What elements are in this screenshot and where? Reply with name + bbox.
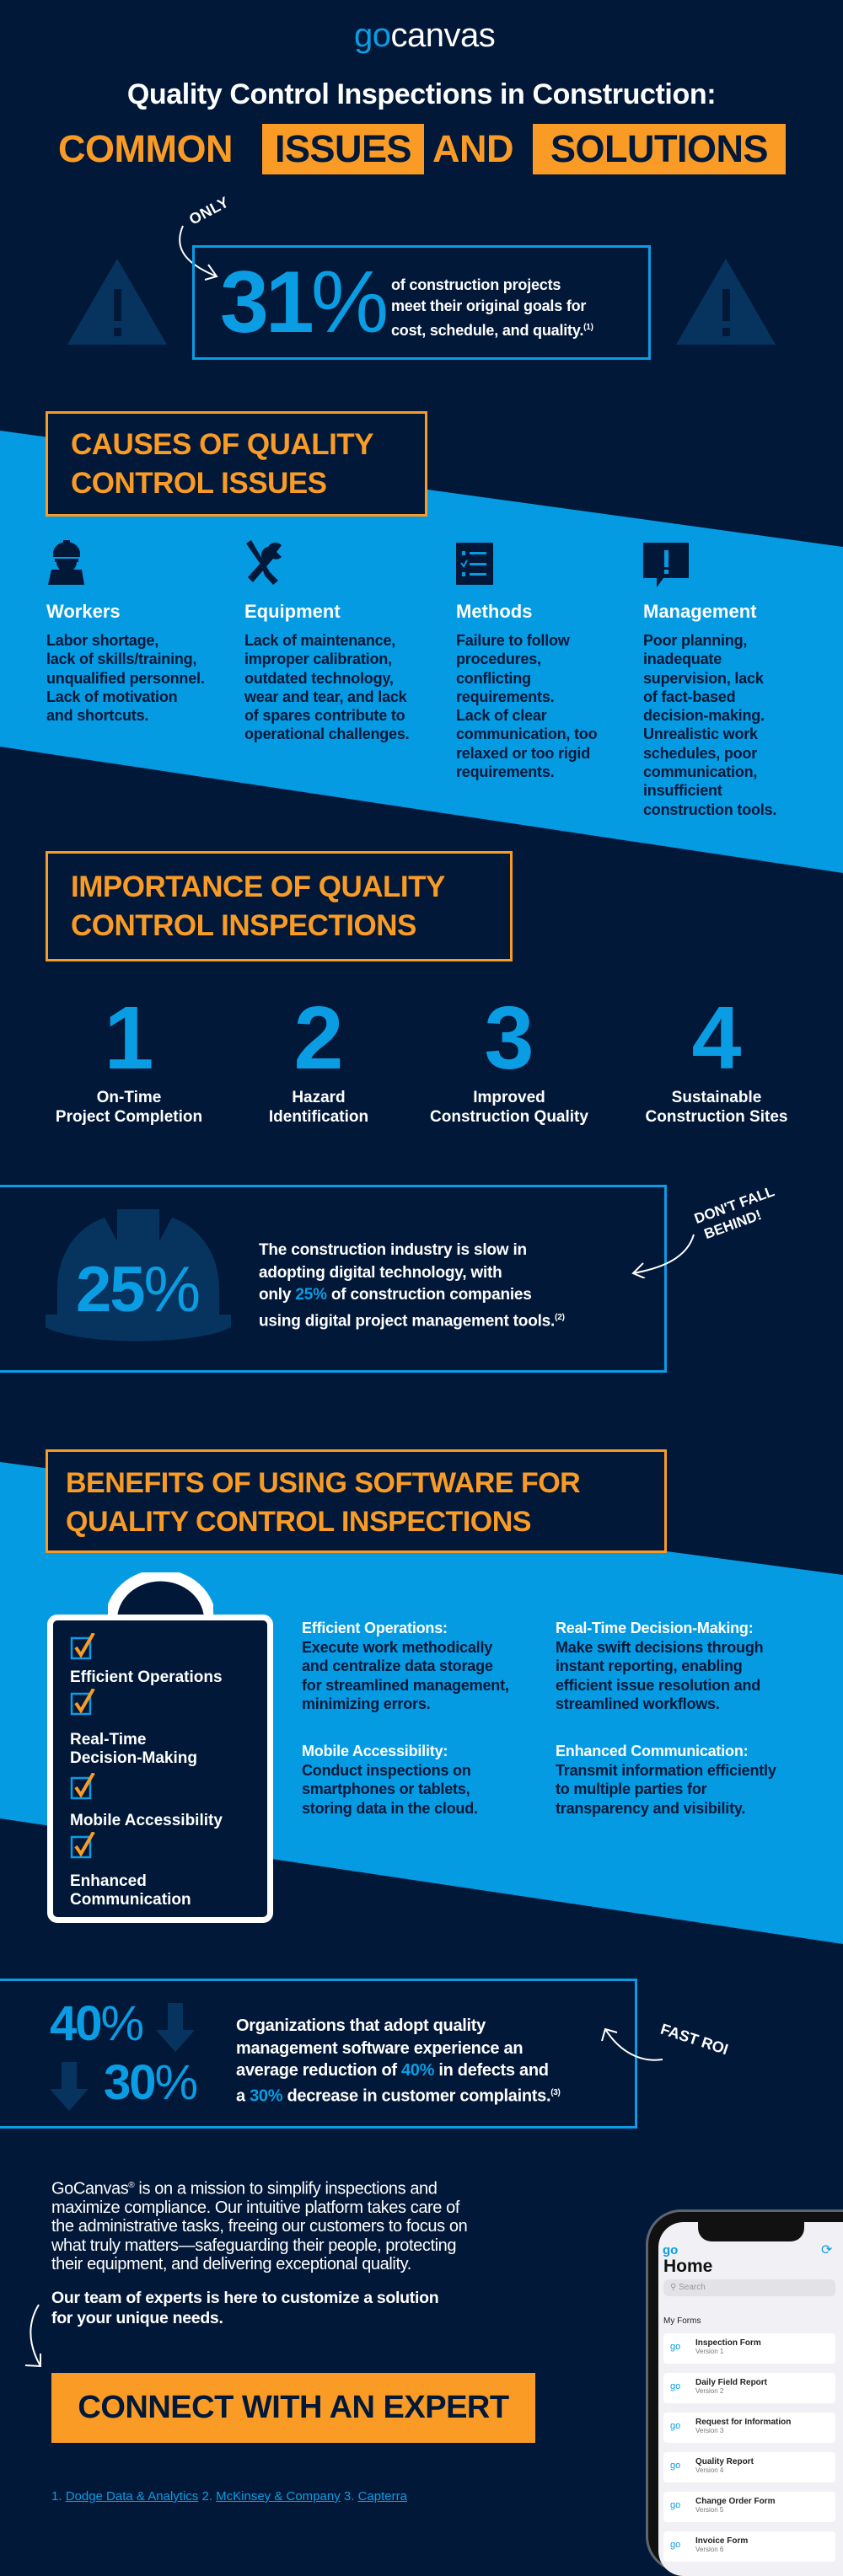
icon: checklist	[456, 543, 493, 585]
benefit: efficient operations: and centralize data storage	[302, 1658, 493, 1674]
subtitle: common issues and solutions: ISSUES	[275, 127, 411, 170]
benefit: mobile: Conduct inspections on	[302, 1761, 471, 1778]
panel: workers: lack of skills/training,	[46, 651, 196, 667]
CTA button: CONNECT WITH AN EXPERT	[78, 2390, 509, 2425]
benefit: real-time: Real-Time Decision-Making:	[556, 1620, 754, 1636]
text: QUALITY CONTROL INSPECTIONS	[66, 1506, 531, 1538]
benefit: mobile: smartphones or tablets,	[302, 1781, 470, 1797]
form list: go	[670, 2500, 680, 2510]
panel: equipment: wear and tear, and lack	[244, 688, 406, 705]
mission text: GoCanvas® is on a mission to simplify inspections and	[51, 2180, 438, 2198]
panel: methods: Methods	[456, 601, 532, 622]
panel: equipment: outdated technology,	[244, 670, 394, 687]
stat box 25%: using digital project management tools.(2)	[259, 1312, 565, 1330]
benefit: mobile: Mobile Accessibility:	[302, 1743, 448, 1759]
form list: Version 6	[695, 2546, 723, 2553]
check items: Enhanced	[70, 1872, 147, 1890]
subtitle: common issues and solutions: SOLUTIONS	[550, 127, 768, 170]
item 3: 3	[485, 988, 534, 1088]
item 4: 4	[692, 988, 741, 1088]
stat box 40% 30%: average reduction of 40% in defects and	[236, 2061, 549, 2080]
check items: Efficient Operations	[70, 1668, 223, 1686]
benefit: mobile	[302, 1743, 478, 1817]
title: Quality Control Inspections in Construction:	[127, 78, 716, 110]
panel: workers: Labor shortage,	[46, 632, 158, 649]
panel: methods	[456, 543, 597, 780]
phone mockup	[646, 2209, 843, 2576]
callout: fast roi	[601, 2021, 730, 2061]
form list: Quality Report	[695, 2457, 754, 2466]
benefit: real-time: streamlined workflows.	[556, 1695, 720, 1712]
clipboard checklist	[47, 1572, 273, 1923]
icon: tools	[246, 540, 282, 585]
phone mockup: Home	[663, 2257, 712, 2276]
benefit: communication: to multiple parties for	[556, 1781, 706, 1797]
heading: importance	[46, 851, 513, 961]
stat box 25%: only 25% of construction companies	[259, 1286, 532, 1304]
panel: equipment: operational challenges.	[244, 726, 409, 742]
form list: Version 5	[695, 2506, 723, 2514]
item 2: 2	[294, 988, 343, 1088]
panel: equipment: Lack of maintenance,	[244, 632, 395, 649]
text: IMPORTANCE OF QUALITY	[71, 870, 445, 903]
subtitle: common issues and solutions: COMMON	[58, 127, 233, 170]
check items: Mobile Accessibility	[70, 1812, 223, 1829]
stat box 25%: 25%	[76, 1254, 199, 1325]
panel: management: Poor planning,	[643, 632, 747, 649]
stat box 25%: adopting digital technology, with	[259, 1264, 502, 1282]
form list: Change Order Form	[695, 2497, 775, 2506]
panel: methods: Lack of clear	[456, 707, 546, 724]
benefit: real-time	[556, 1620, 763, 1712]
panel: methods: Failure to follow	[456, 632, 570, 649]
item 3: Improved	[473, 1089, 545, 1106]
arrow: down to CTA	[25, 2304, 41, 2367]
panel: workers: Workers	[46, 601, 121, 622]
benefit: efficient operations: Execute work methodically	[302, 1638, 492, 1655]
icon: helmet	[46, 1209, 231, 1342]
panel: equipment	[244, 540, 409, 742]
panel: equipment: of spares contribute to	[244, 707, 405, 724]
text: CAUSES OF QUALITY	[71, 428, 373, 461]
stat box 40% 30%: a 30% decrease in customer complaints.(3)	[236, 2086, 561, 2105]
icon: down arrow	[50, 2062, 89, 2111]
item 1: 1	[105, 988, 153, 1088]
footnotes: 1. Dodge Data & Analytics 2. McKinsey & Company 3. Capterra	[51, 2489, 407, 2504]
callout: fast roi: FAST ROI	[658, 2021, 730, 2058]
panel: management: communication,	[643, 763, 757, 780]
heading: causes	[46, 411, 427, 517]
form list: Version 1	[695, 2348, 723, 2355]
icon: worker	[48, 540, 84, 585]
icon: down arrow	[156, 2003, 195, 2052]
item 1: On-Time	[97, 1089, 161, 1106]
callout: only label and arrow: ONLY	[186, 193, 232, 228]
logo: gocanvas	[354, 17, 495, 54]
icon: alert speech bubble	[643, 543, 689, 587]
text: CONTROL ISSUES	[71, 467, 327, 500]
form list: go	[670, 2461, 680, 2471]
item 4	[646, 988, 787, 1126]
phone mockup: ⚲ Search	[670, 2283, 706, 2292]
benefit: efficient operations: for streamlined management,	[302, 1677, 509, 1694]
item 1: Project Completion	[56, 1108, 202, 1126]
benefit: efficient operations: Efficient Operations:	[302, 1620, 448, 1636]
CTA button	[51, 2373, 535, 2443]
subtitle: common issues and solutions	[58, 124, 786, 174]
form list: go	[670, 2342, 680, 2352]
panel: management: inadequate	[643, 651, 722, 667]
panel: management: Unrealistic work	[643, 726, 758, 742]
panel: management	[643, 543, 776, 818]
benefit: communication: Enhanced Communication:	[556, 1743, 748, 1759]
panel: workers: unqualified personnel.	[46, 670, 205, 687]
panel: management: supervision, lack	[643, 670, 764, 687]
panel: methods: requirements.	[456, 763, 554, 780]
stat box 40% 30%: 30%	[104, 2055, 196, 2110]
callout: only label and arrow	[179, 193, 232, 281]
text: BENEFITS OF USING SOFTWARE FOR	[66, 1467, 580, 1499]
benefit: real-time: Make swift decisions through	[556, 1638, 763, 1655]
phone mockup: My Forms	[663, 2316, 701, 2326]
check items: Communication	[70, 1891, 191, 1909]
stat box 31%: cost, schedule, and quality.(1)	[391, 322, 593, 339]
check items: Decision-Making	[70, 1749, 197, 1767]
mission text: their equipment, and delivering exceptional quality.	[51, 2255, 411, 2273]
panel: workers: Lack of motivation	[46, 688, 177, 705]
panel: management: insufficient	[643, 782, 722, 799]
stat box 31%	[192, 245, 651, 360]
form list: Version 4	[695, 2466, 723, 2474]
item 3	[430, 988, 588, 1126]
phone mockup: ⟳	[821, 2243, 832, 2257]
check items	[70, 1633, 223, 1909]
stat box 31%: 31%	[220, 254, 385, 351]
panel: management: schedules, poor	[643, 745, 757, 762]
item 3: Construction Quality	[430, 1108, 588, 1126]
panel: methods: requirements.	[456, 688, 554, 705]
benefit: efficient operations	[302, 1620, 509, 1712]
benefit: real-time: efficient issue resolution and	[556, 1677, 760, 1694]
form list	[663, 2333, 835, 2562]
panel: workers	[46, 540, 205, 724]
callout: don't fall behind: DON'T FALL	[692, 1183, 776, 1227]
text: CONTROL INSPECTIONS	[71, 909, 416, 942]
form list: Inspection Form	[695, 2338, 761, 2348]
panel: methods: conflicting	[456, 670, 531, 687]
numbered list: importance	[56, 988, 787, 1126]
form list: Request for Information	[695, 2418, 791, 2427]
panel: management: decision-making.	[643, 707, 765, 724]
item 4: Sustainable	[672, 1089, 761, 1106]
benefit: communication: Transmit information efficiently	[556, 1761, 776, 1778]
mission text	[51, 2180, 467, 2273]
mission text: what truly matters—safeguarding their people, protecting	[51, 2236, 456, 2255]
stat box 25%: The construction industry is slow in	[259, 1241, 527, 1259]
form list: go	[670, 2540, 680, 2550]
benefit: efficient operations: minimizing errors.	[302, 1695, 430, 1712]
benefit: communication	[556, 1743, 776, 1817]
benefit: mobile: storing data in the cloud.	[302, 1800, 478, 1817]
expert text	[51, 2289, 438, 2327]
heading: benefits	[46, 1449, 667, 1553]
panel: workers: and shortcuts.	[46, 707, 148, 724]
mission text: the administrative tasks, freeing our customers to focus on	[51, 2217, 467, 2236]
panel: equipment: improper calibration,	[244, 651, 392, 667]
benefit: real-time: instant reporting, enabling	[556, 1658, 743, 1674]
panel: methods: procedures,	[456, 651, 541, 667]
stat box 40% 30%: management software experience an	[236, 2039, 523, 2058]
subtitle: common issues and solutions: AND	[432, 127, 513, 170]
item 1	[56, 988, 202, 1126]
panel: management: construction tools.	[643, 801, 776, 818]
item 2	[269, 988, 368, 1126]
form list: go	[670, 2421, 680, 2431]
panel: management: Management	[643, 601, 756, 622]
icon: warning triangle left	[67, 259, 167, 345]
check items: Real-Time	[70, 1731, 146, 1749]
item 2: Hazard	[292, 1089, 346, 1106]
form list: Daily Field Report	[695, 2378, 767, 2387]
item 2: Identification	[269, 1108, 368, 1126]
stat box 40% 30%: Organizations that adopt quality	[236, 2016, 486, 2035]
mission text: maximize compliance. Our intuitive platform takes care of	[51, 2198, 459, 2217]
panel: equipment: Equipment	[244, 601, 341, 622]
stat box 31%: of construction projects	[391, 276, 561, 293]
form list: Version 3	[695, 2427, 723, 2434]
form list: Invoice Form	[695, 2536, 748, 2546]
callout: don't fall behind	[631, 1183, 776, 1278]
panel: methods: communication, too	[456, 726, 597, 742]
form list: Version 2	[695, 2387, 723, 2395]
form list: go	[670, 2381, 680, 2391]
expert text: Our team of experts is here to customize a solution	[51, 2289, 438, 2307]
item 4: Construction Sites	[646, 1108, 787, 1126]
stat box 25%	[0, 1185, 667, 1373]
stat box 40% 30%	[0, 1979, 637, 2129]
expert text: for your unique needs.	[51, 2309, 223, 2327]
icon: warning triangle right	[676, 259, 776, 345]
benefit: communication: transparency and visibility.	[556, 1800, 745, 1817]
panel: management: of fact-based	[643, 688, 735, 705]
callout: don't fall behind: BEHIND!	[702, 1207, 764, 1242]
panel: methods: relaxed or too rigid	[456, 745, 590, 762]
stat box 31%: meet their original goals for	[391, 297, 586, 314]
stat box 40% 30%: 40%	[50, 1996, 142, 2051]
phone mockup: go	[663, 2243, 678, 2257]
